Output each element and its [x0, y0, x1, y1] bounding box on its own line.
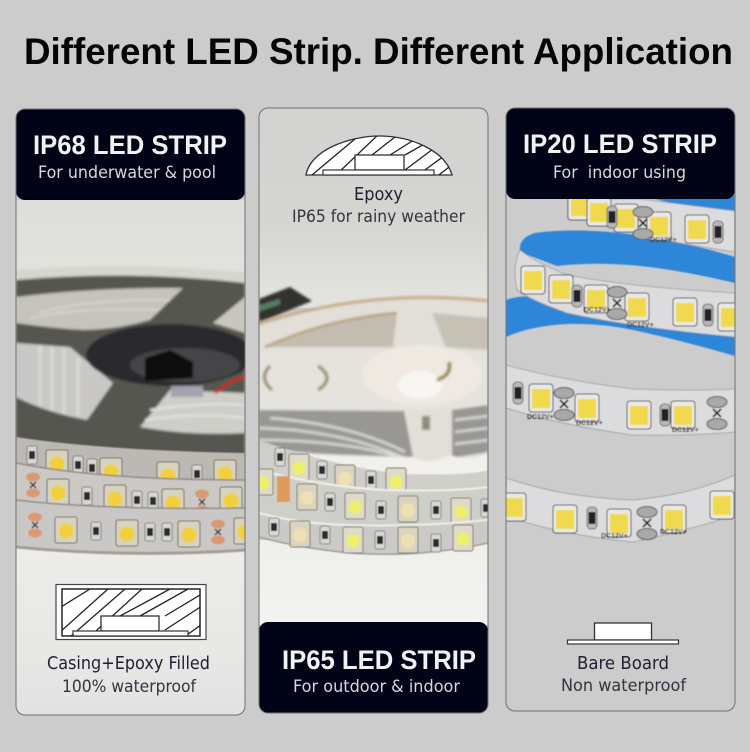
- subheading: for outdoor and indoor: For outdoor & indoor: [293, 677, 460, 696]
- heading: IP20 LED STRIP: IP20 LED STRIP: [523, 129, 717, 159]
- panel: IP65 LED strip: [253, 108, 491, 713]
- photo: IP65 reel and strips: [260, 165, 488, 625]
- photo: IP20 bare strips with blue backing: [502, 192, 742, 542]
- photo: IP20 bare strips with blue backing: DC12V+: [650, 237, 677, 244]
- icon: casing and epoxy cross-section: [55, 584, 207, 640]
- title: Different LED Strip. Different Application: [24, 30, 733, 72]
- caption: epoxy: Epoxy: [354, 185, 403, 205]
- caption: 100% waterproof: 100% waterproof: [62, 677, 197, 696]
- caption: casing and epoxy filled: Casing+Epoxy Filled: [47, 654, 210, 674]
- caption: non waterproof: Non waterproof: [561, 676, 687, 695]
- photo: IP20 bare strips with blue backing: DC12V+: [627, 322, 654, 329]
- icon: epoxy dome cross-section: [305, 135, 453, 176]
- header: IP20: [506, 108, 735, 199]
- panel: IP68 LED strip: [16, 109, 256, 715]
- photo: IP20 bare strips with blue backing: DC12V+: [527, 414, 554, 421]
- heading: IP68 LED STRIP: IP68 LED STRIP: [33, 130, 227, 160]
- photo: IP20 bare strips with blue backing: DC12V+: [576, 420, 603, 427]
- photo: IP20 bare strips with blue backing: DC12V+: [584, 307, 611, 314]
- photo: IP20 bare strips with blue backing: DC12V+: [601, 533, 628, 540]
- subheading: for underwater and pool: For underwater & pool: [38, 163, 216, 182]
- panel 1 outline: [16, 109, 245, 715]
- photo: IP20 bare strips with blue backing: DC12V+: [660, 529, 687, 536]
- subheading: for indoor using: For indoor using: [553, 163, 686, 182]
- photo: IP20 bare strips with blue backing: DC12V+: [672, 427, 699, 434]
- header: IP68: [16, 109, 245, 200]
- photo: IP68 reel and strips: [16, 200, 256, 715]
- icon: bare board cross-section: [568, 623, 678, 644]
- heading: IP65 LED STRIP: IP65 LED STRIP: [282, 645, 476, 675]
- caption: IP65 for rainy weather: IP65 for rainy weather: [292, 207, 465, 226]
- panel: IP20 LED strip: [502, 108, 742, 711]
- header: IP65: [259, 622, 488, 713]
- panel 3 outline: [506, 108, 735, 711]
- panel 2 outline: [259, 108, 488, 713]
- caption: bare board: Bare Board: [577, 654, 669, 674]
